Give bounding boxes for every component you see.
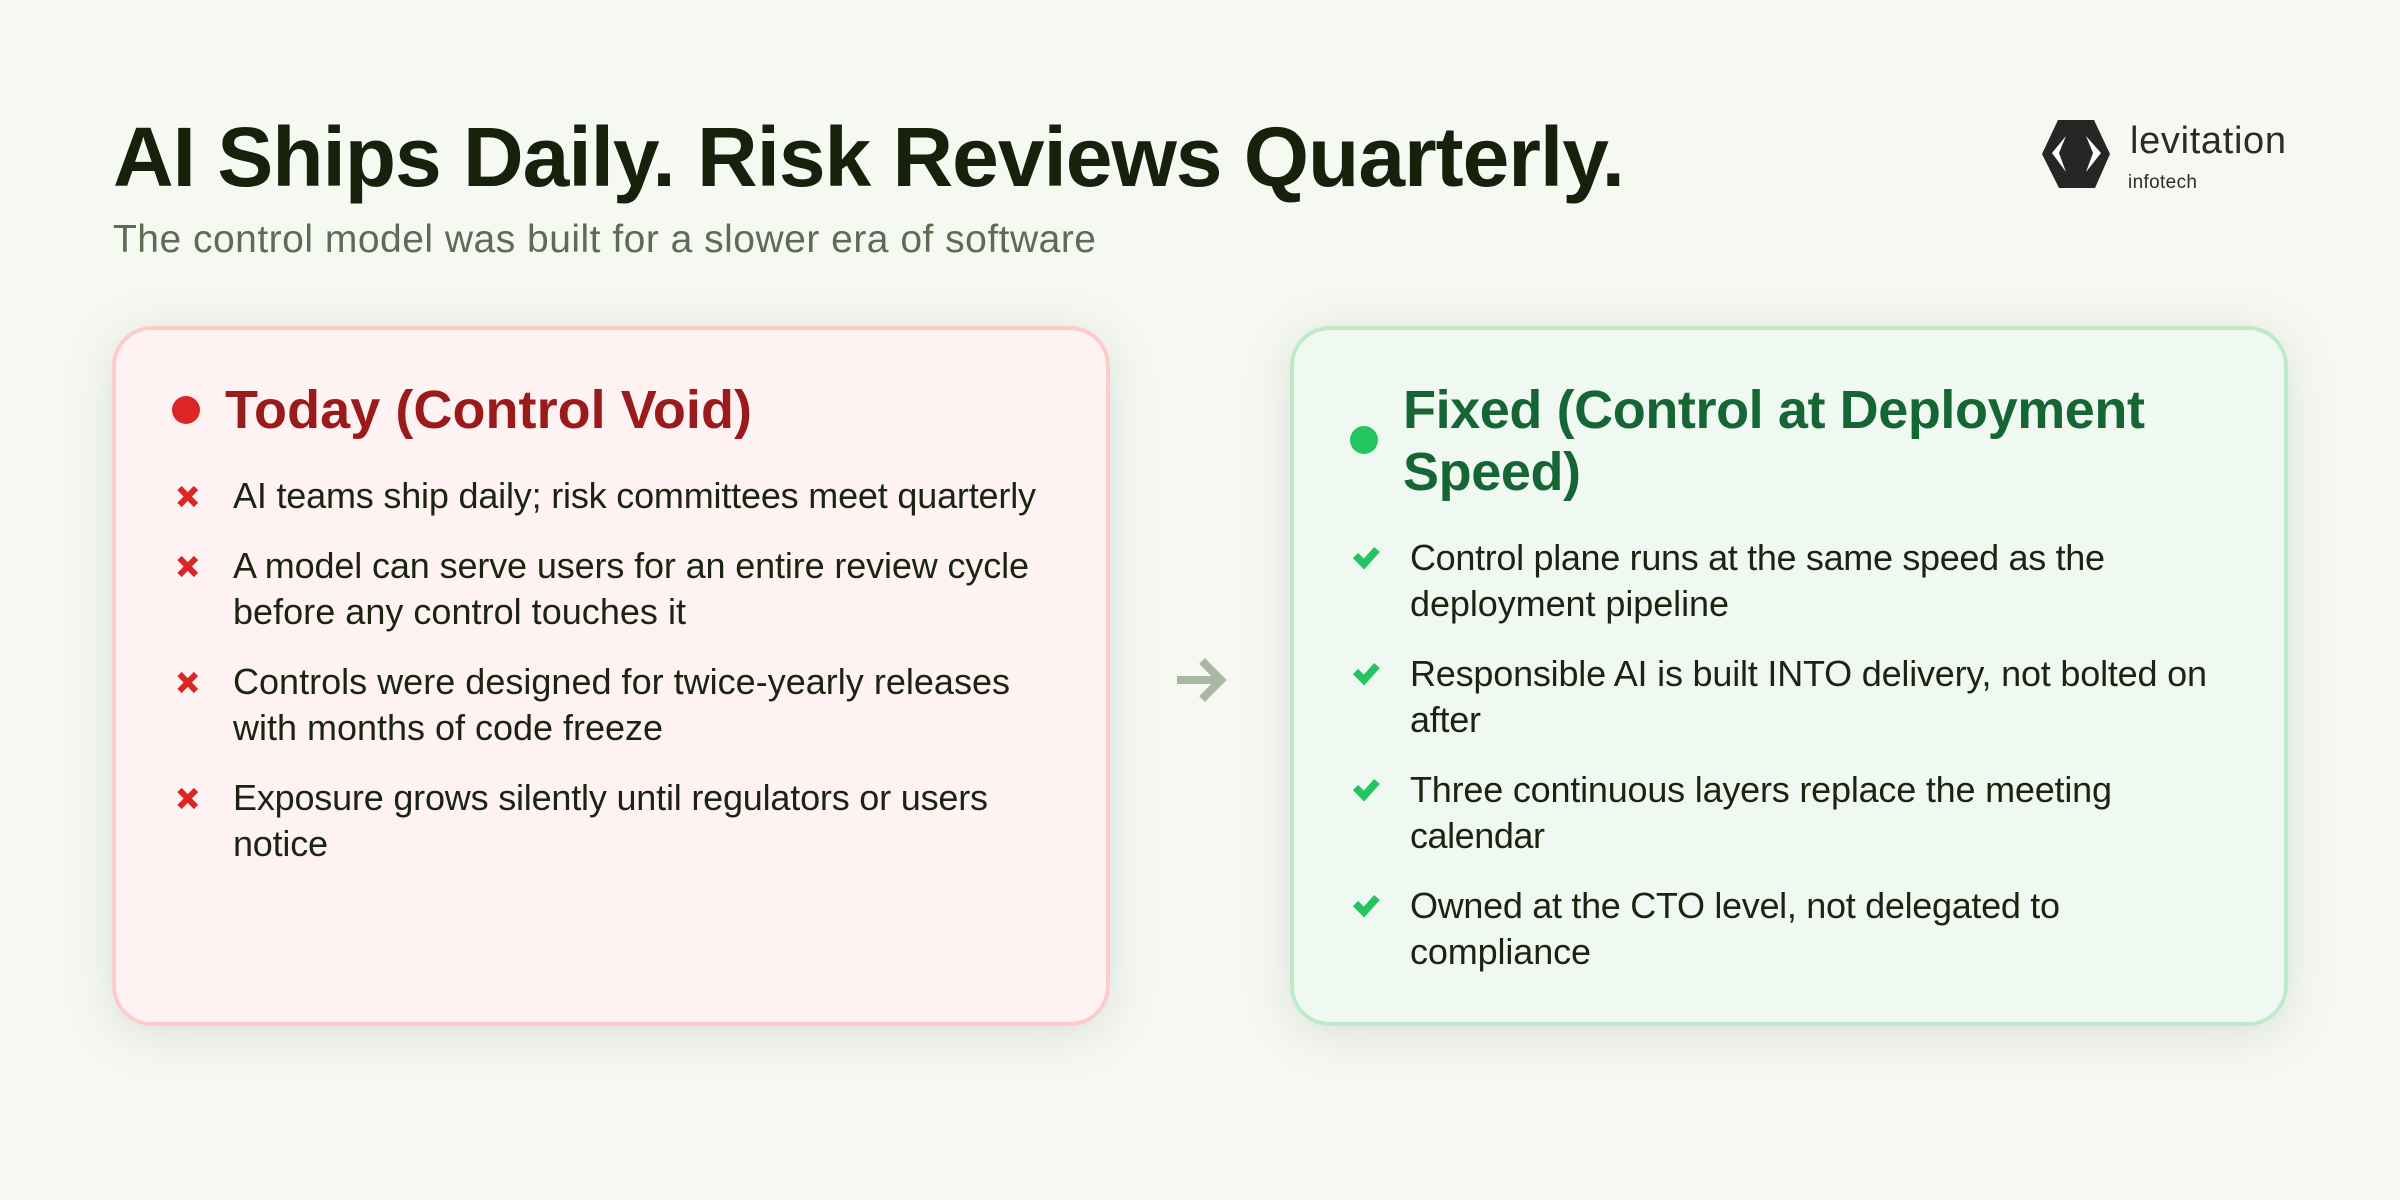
- logo: levitation infotech: [2042, 120, 2286, 193]
- item 1: [1356, 537, 2105, 624]
- panel: today (control void): [114, 328, 1108, 1024]
- item 2: [180, 545, 1029, 632]
- item 3: calendar: [1410, 815, 1545, 856]
- item 2: [1356, 653, 2207, 740]
- heading: fixed: [1403, 380, 2145, 502]
- item 2: before any control touches it: [233, 591, 686, 632]
- item 4: [180, 777, 988, 864]
- item 4: Exposure grows silently until regulators or users: [233, 777, 988, 818]
- item 2: Responsible AI is built INTO delivery, not bolted on: [1410, 653, 2207, 694]
- panel background: [114, 328, 1108, 1024]
- item 2: A model can serve users for an entire review cycle: [233, 545, 1029, 586]
- panel: fixed (control at deployment speed): [1292, 328, 2286, 1024]
- item 3: [180, 661, 1010, 748]
- item 3: Three continuous layers replace the meeting: [1410, 769, 2112, 810]
- item 3: [1356, 769, 2112, 856]
- panel background: [1292, 328, 2286, 1024]
- item 4: notice: [233, 823, 328, 864]
- heading: fixed: Speed): [1403, 442, 1581, 502]
- item 2: after: [1410, 699, 1481, 740]
- item 4: compliance: [1410, 931, 1591, 972]
- item 1: deployment pipeline: [1410, 583, 1729, 624]
- status dot: red: [172, 396, 200, 424]
- icon: logo hexagon: [2042, 120, 2110, 188]
- logo wordmark: levitation: [2130, 120, 2286, 162]
- item 1: Control plane runs at the same speed as the: [1410, 537, 2105, 578]
- arrow: [1177, 661, 1222, 699]
- status dot: green: [1350, 426, 1378, 454]
- item 4: Owned at the CTO level, not delegated to: [1410, 885, 2060, 926]
- item 4: [1356, 885, 2060, 972]
- logo subtext: infotech: [2128, 172, 2197, 193]
- title: AI Ships Daily. Risk Reviews Quarterly.: [113, 110, 1625, 204]
- item 1: AI teams ship daily; risk committees meet quarterly: [233, 475, 1036, 516]
- subtitle: The control model was built for a slower era of software: [113, 218, 1096, 261]
- heading: today: Today (Control Void): [225, 380, 752, 440]
- item 3: Controls were designed for twice-yearly releases: [233, 661, 1010, 702]
- item 3: with months of code freeze: [232, 707, 663, 748]
- heading: fixed: Fixed (Control at Deployment: [1403, 380, 2145, 440]
